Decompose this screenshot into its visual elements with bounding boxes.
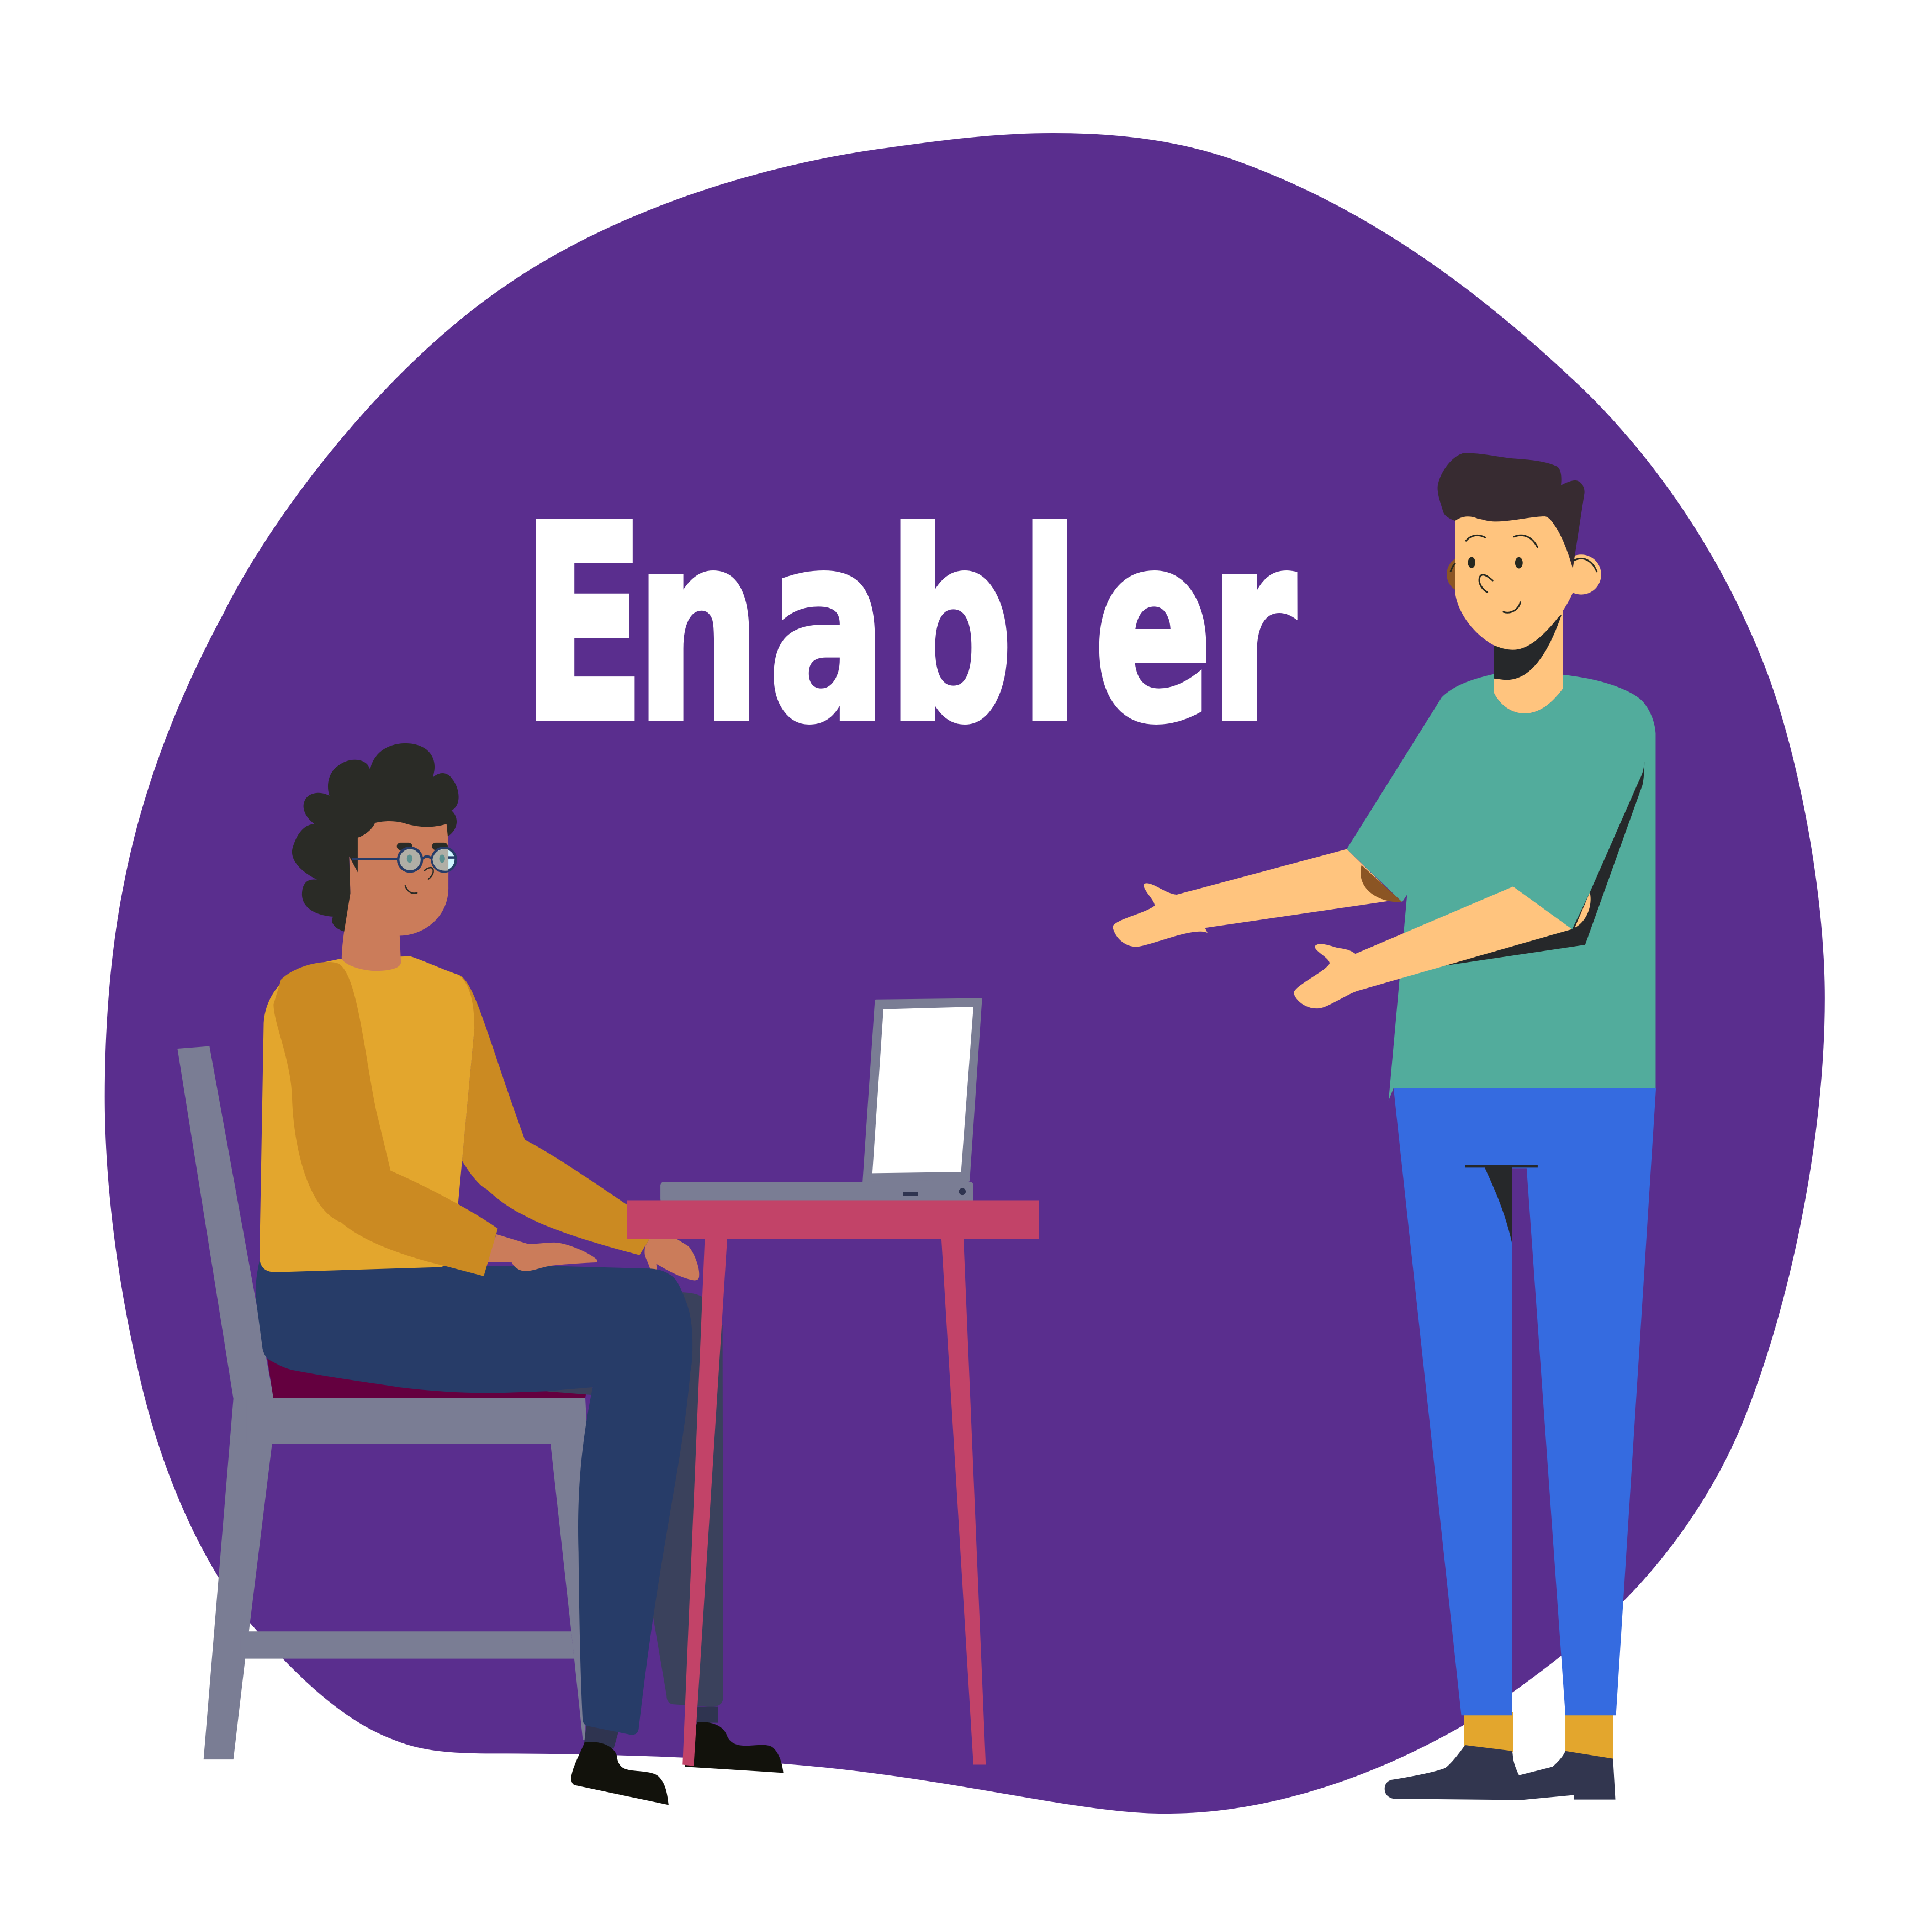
far hand [644,1239,699,1281]
far shoe [685,1722,784,1773]
glasses [352,848,457,871]
green shirt [1347,674,1655,1101]
face and neck [342,821,448,971]
chair [177,1046,587,1759]
far leg [546,1292,784,1773]
quiff hair [1438,453,1585,569]
near sleeve [273,962,498,1276]
socks [1464,1712,1613,1759]
head [292,743,459,971]
sleeve shadow [1361,865,1402,902]
arm shadow [1442,762,1644,966]
nose and mouth [405,868,433,893]
curly hair [292,743,459,932]
chair seat cushion [267,1356,586,1398]
seated person with chair [177,743,784,1805]
head [1438,453,1601,680]
facial features [1451,535,1597,612]
shirt [260,956,474,1272]
eyebrows [397,843,448,850]
table [627,1200,1039,1766]
trousers [256,1261,692,1735]
far ear [1447,556,1484,593]
near hand [485,1234,597,1271]
neck shadow [1494,615,1562,680]
far sleeve [458,975,653,1255]
standing person [1113,453,1656,1800]
pointing arm [1294,886,1572,1008]
outstretched arm [1113,849,1399,947]
near ear [1561,554,1601,595]
laptop [660,1000,981,1203]
near shoe [571,1742,669,1805]
neck [1494,610,1563,713]
near sock [584,1724,618,1748]
shoes [1385,1745,1616,1800]
trousers [1394,1088,1656,1715]
title: nabler [636,479,1297,779]
purple background blob [105,133,1825,1814]
title: E [521,469,646,782]
forearm skin behind sleeve [1575,892,1591,928]
face [1455,512,1574,650]
crotch shadow [1465,1165,1538,1245]
